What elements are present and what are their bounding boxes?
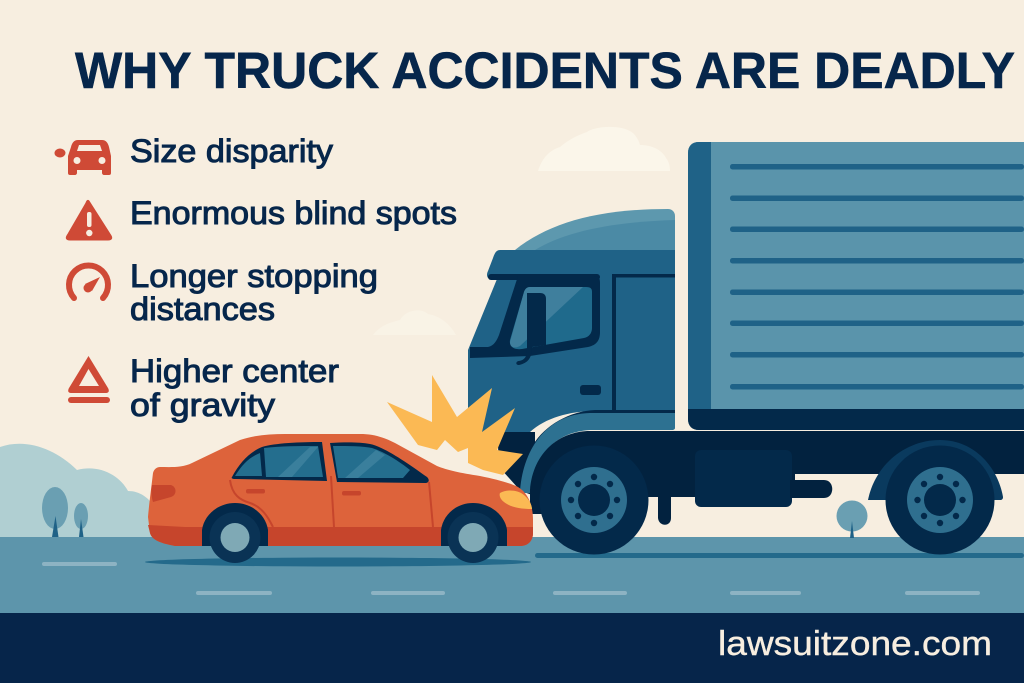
item: size disparity xyxy=(54,133,333,175)
car headlight xyxy=(500,491,532,509)
tree: left small xyxy=(74,503,88,537)
car glass highlights xyxy=(278,447,385,478)
car rear wheel xyxy=(202,503,268,563)
cloud: lower xyxy=(373,310,456,335)
cloud: upper xyxy=(538,127,670,171)
list: risk factors xyxy=(54,133,457,423)
icon: warning triangle xyxy=(66,200,112,240)
car body xyxy=(148,434,533,546)
car front glass xyxy=(333,446,410,478)
car door handles xyxy=(246,489,361,496)
impact flash xyxy=(387,375,523,492)
road shadows xyxy=(145,553,1024,566)
footer band xyxy=(0,613,1024,683)
tree: left large xyxy=(42,487,68,537)
item: center of gravity xyxy=(68,353,339,423)
truck trailer xyxy=(688,142,1024,430)
truck xyxy=(468,142,1024,554)
label: higher center of gravity: of gravity xyxy=(130,387,275,423)
car door seams xyxy=(230,476,433,527)
rear wheel xyxy=(868,440,1003,554)
car rear window xyxy=(232,442,327,481)
background hills xyxy=(0,444,160,538)
label: longer stopping distances: Longer stopping xyxy=(130,258,378,294)
car rear glass xyxy=(235,446,323,477)
truck chassis xyxy=(497,431,1024,525)
icon: speedometer xyxy=(69,265,108,298)
front wheel xyxy=(540,446,648,554)
item: stopping distances xyxy=(69,258,378,327)
road xyxy=(0,537,1024,613)
car tail light xyxy=(151,485,176,502)
tree: roadside xyxy=(836,500,868,538)
item: blind spots xyxy=(66,195,457,240)
truck cab xyxy=(468,209,675,514)
title: WHY TRUCK ACCIDENTS ARE DEADLY xyxy=(75,42,1015,99)
car lower sill xyxy=(148,525,533,546)
label: size disparity: Size disparity xyxy=(130,133,333,169)
footer website: lawsuitzone.com xyxy=(718,625,992,663)
label: enormous blind spots: Enormous blind spots xyxy=(130,195,457,231)
icon: car xyxy=(54,140,111,175)
label: longer stopping distances xyxy=(130,258,378,327)
car front wheel xyxy=(441,503,507,563)
car front window xyxy=(330,442,429,483)
label: higher center of gravity: Higher center xyxy=(130,353,339,389)
car xyxy=(148,434,533,563)
label: longer stopping distances: distances xyxy=(130,291,275,327)
label: higher center of gravity xyxy=(130,353,339,423)
icon: triangle over bar xyxy=(68,356,110,403)
